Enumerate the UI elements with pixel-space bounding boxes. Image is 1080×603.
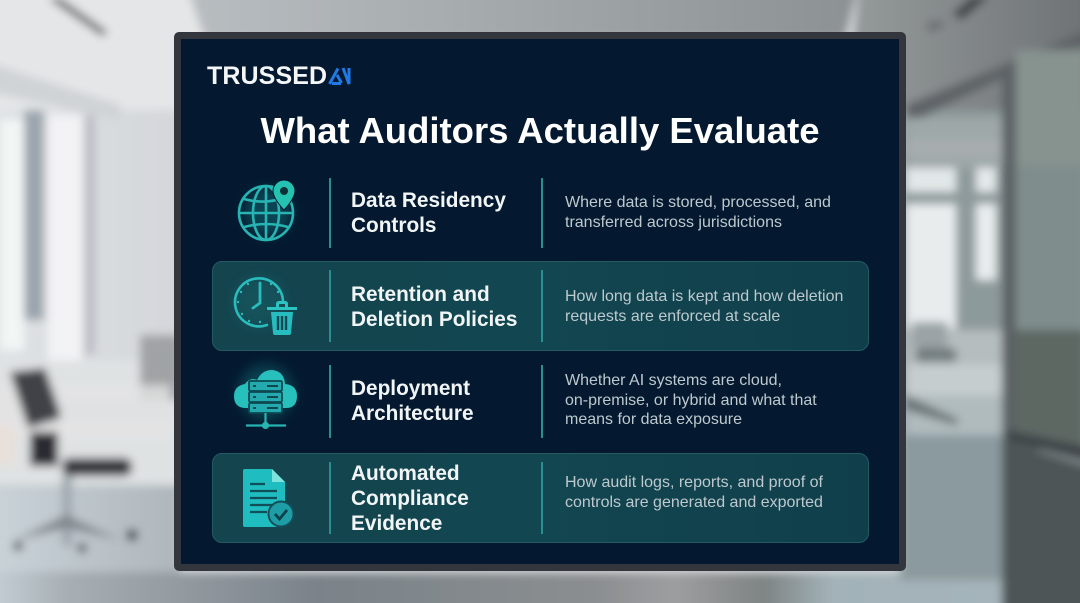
heading: Data Residency bbox=[351, 189, 506, 212]
icon: clock and trash bbox=[234, 277, 297, 335]
divider bbox=[541, 365, 542, 438]
logo: TRUSSEDAI: TRUSSED bbox=[207, 62, 327, 90]
heading: Automated bbox=[351, 462, 460, 485]
row 4: evidence band bbox=[212, 453, 869, 543]
divider bbox=[329, 462, 330, 534]
icon: cloud server bbox=[234, 360, 298, 430]
heading: Compliance bbox=[351, 487, 469, 510]
description: Where data is stored, processed, and bbox=[565, 194, 831, 211]
divider bbox=[541, 270, 542, 342]
heading: Retention and bbox=[351, 283, 490, 306]
description: How audit logs, reports, and proof of bbox=[565, 474, 823, 491]
divider bbox=[329, 178, 330, 248]
row 1: data residency bbox=[238, 178, 831, 248]
row 2: retention band bbox=[212, 261, 869, 351]
description bbox=[565, 194, 831, 231]
description: requests are enforced at scale bbox=[565, 308, 780, 325]
panel: main dark board bbox=[174, 32, 906, 571]
icon: logo AI mark bbox=[328, 68, 350, 85]
heading bbox=[351, 377, 474, 425]
heading bbox=[351, 283, 517, 331]
row 3: deployment bbox=[234, 360, 817, 438]
description: Whether AI systems are cloud, bbox=[565, 372, 782, 389]
description bbox=[565, 288, 843, 325]
title: What Auditors Actually Evaluate bbox=[260, 110, 820, 151]
description bbox=[565, 372, 817, 428]
heading bbox=[351, 189, 506, 237]
divider bbox=[329, 270, 330, 342]
heading: Controls bbox=[351, 214, 436, 237]
heading bbox=[351, 462, 469, 535]
icon: globe with pin bbox=[238, 180, 296, 242]
description: means for data exposure bbox=[565, 411, 742, 428]
heading: Architecture bbox=[351, 402, 474, 425]
heading: Evidence bbox=[351, 512, 442, 535]
icon: document with check bbox=[243, 469, 294, 528]
description: controls are generated and exported bbox=[565, 494, 823, 511]
heading: Deployment bbox=[351, 377, 470, 400]
description: How long data is kept and how deletion bbox=[565, 288, 843, 305]
divider bbox=[329, 365, 330, 438]
description: on-premise, or hybrid and what that bbox=[565, 392, 817, 409]
description: transferred across jurisdictions bbox=[565, 214, 782, 231]
description bbox=[565, 474, 823, 511]
divider bbox=[541, 462, 542, 534]
heading: Deletion Policies bbox=[351, 308, 517, 331]
divider bbox=[541, 178, 542, 248]
